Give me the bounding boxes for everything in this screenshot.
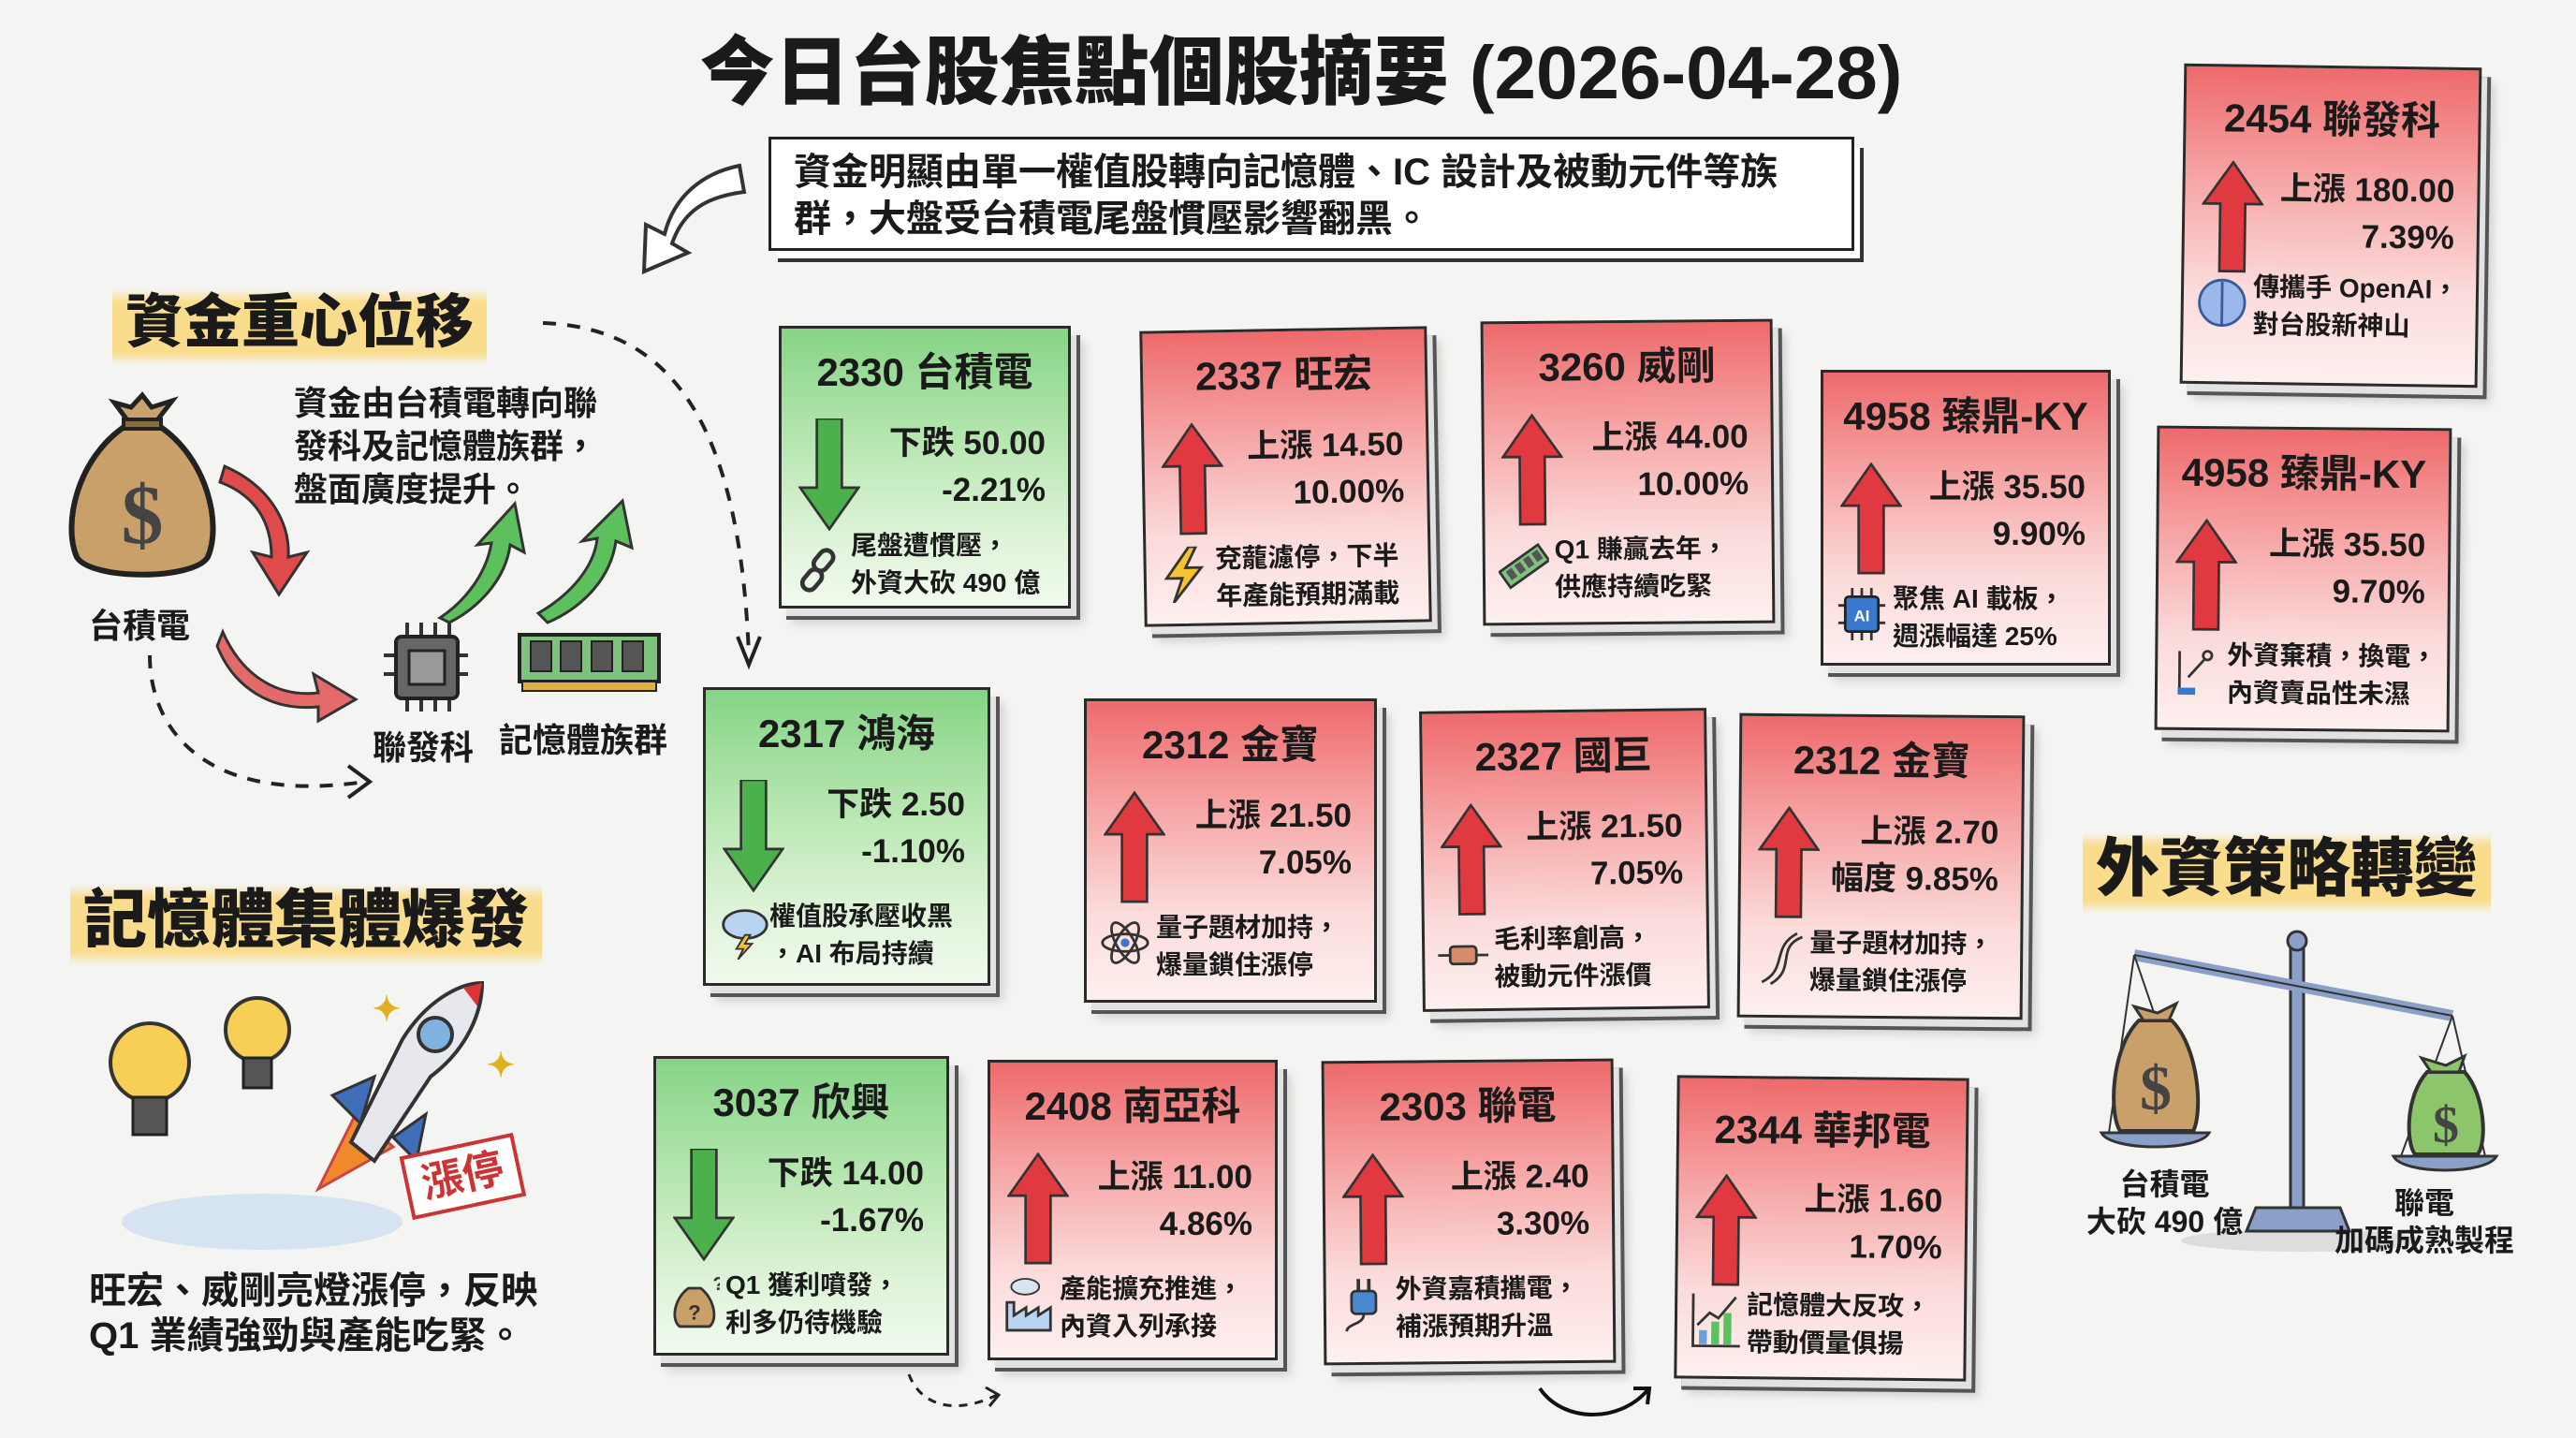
card: 2344 華邦電: 記憶體大反攻， (1747, 1290, 1930, 1321)
card: 2303 聯電 (1322, 1059, 1616, 1365)
card: 2344 華邦電: 帶動價量俱揚 (1747, 1328, 1904, 1358)
card: 2327 國巨: 上漲 21.50 (1526, 807, 1683, 845)
card: 3260 威剛: 上漲 44.00 (1591, 418, 1749, 456)
card: 2344 華邦電 (1674, 1075, 1969, 1382)
card: 2330 台積電: 下跌 50.00 (889, 425, 1046, 462)
illustration: lightbulbs and rocket: ✦ (487, 1046, 515, 1084)
card: 2317 鴻海: ，AI 布局持續 (769, 939, 934, 968)
card: 2303 聯電: 3.30% (1497, 1205, 1589, 1242)
icon: chip (384, 623, 468, 712)
card: 2454 聯發科: 2454 聯發科 (2224, 95, 2440, 143)
card: 2303 聯電: 補漲預期升溫 (1396, 1311, 1553, 1342)
text block: memory surge (89, 1270, 538, 1357)
card: 2337 旺宏: 2337 旺宏 (1195, 351, 1373, 399)
card: 2312 金寶 (1) (1084, 698, 1377, 1003)
card: 2454 聯發科: 對台股新神山 (2252, 310, 2410, 341)
card: 2454 聯發科: 上漲 180.00 (2279, 170, 2455, 210)
heading: 資金重心位移: 資金重心位移 (125, 290, 474, 355)
card: 2330 台積電: 外資大砍 490 億 (851, 568, 1040, 597)
card: 2337 旺宏: 年產能預期滿載 (1216, 579, 1399, 610)
card: 2317 鴻海: 權值股承壓收黑 (769, 902, 953, 931)
illustration: scale: $ (2140, 1052, 2172, 1123)
dashed arrow: bottom small (908, 1374, 1002, 1407)
icon: money bag 台積電: $ (122, 469, 163, 562)
card: 2408 南亞科: 4.86% (1160, 1206, 1252, 1242)
card: 3037 欣興: 3037 欣興 (712, 1080, 890, 1124)
card: 2312 金寶 (2): 上漲 2.70 (1860, 814, 1998, 851)
card: 3037 欣興: Q1 獲利噴發， (725, 1270, 899, 1299)
card: 2327 國巨: 被動元件漲價 (1494, 961, 1652, 991)
card: 2312 金寶 (2): 2312 金寶 (1793, 738, 1970, 784)
illustration: scale: $ (2433, 1096, 2459, 1154)
card: 2337 旺宏: 兗蘢濾停，下半 (1215, 541, 1399, 573)
card: 2408 南亞科: 產能擴充推進， (1060, 1274, 1243, 1303)
card: 2408 南亞科 (988, 1060, 1278, 1360)
card: 3037 欣興: ? (688, 1300, 701, 1324)
card: 3260 威剛: 供應持續吃緊 (1555, 571, 1712, 602)
card: 2303 聯電: 2303 聯電 (1379, 1083, 1557, 1129)
card: 2317 鴻海: 2317 鴻海 (758, 712, 935, 756)
card: 2344 華邦電: 上漲 1.60 (1804, 1181, 1943, 1219)
text block: capital shift: 盤面廣度提升。 (294, 470, 530, 508)
card: 2408 南亞科: 內資入列承接 (1060, 1312, 1217, 1341)
card: 4958 臻鼎-KY (1): 上漲 35.50 (1929, 469, 2086, 506)
card: 4958 臻鼎-KY (1): 4958 臻鼎-KY (1843, 394, 2088, 438)
card: 2312 金寶 (2): 爆量鎖住漲停 (1809, 965, 1967, 996)
label: 聯電 加碼成熟製程: 聯電 (2394, 1186, 2454, 1220)
card: 2344 華邦電: 1.70% (1849, 1228, 1942, 1266)
text block: memory surge: Q1 業績強勁與產能吃緊。 (89, 1315, 523, 1357)
dashed arrow: left loop (148, 655, 373, 800)
arrow: red curve to chip (215, 628, 359, 724)
label: 聯電 加碼成熟製程 (2334, 1186, 2514, 1257)
card: 2303 聯電: 上漲 2.40 (1451, 1158, 1589, 1196)
card: 2327 國巨: 7.05% (1590, 854, 1683, 892)
card: 4958 臻鼎-KY (2): 外資棄積，換電， (2227, 640, 2437, 671)
card: 3260 威剛 (1481, 319, 1775, 625)
arrow: curved from subtitle (642, 163, 747, 275)
label: 台積電 大砍490億: 大砍 490 億 (2086, 1205, 2243, 1239)
card: 2312 金寶 (1): 量子題材加持， (1156, 913, 1339, 942)
card: 2327 國巨 (1419, 708, 1710, 1012)
card: 4958 臻鼎-KY (2): 內資賣品性未濕 (2227, 678, 2410, 709)
card: 2327 國巨: 2327 國巨 (1474, 733, 1652, 779)
card: 2330 台積電 (779, 326, 1071, 609)
card: 2408 南亞科: 上漲 11.00 (1098, 1159, 1252, 1196)
card: 3037 欣興 (653, 1056, 949, 1356)
arrow: red down (218, 464, 311, 597)
card: 4958 臻鼎-KY (1) (1821, 370, 2111, 666)
card: 2303 聯電: 外資嘉積攜電， (1396, 1273, 1579, 1304)
card: 4958 臻鼎-KY (1): AI (1854, 607, 1869, 624)
card: 2454 聯發科: 傳攜手 OpenAI， (2253, 272, 2459, 304)
label: 台積電 大砍490億: 台積電 (2119, 1167, 2209, 1201)
card: 4958 臻鼎-KY (2) (2155, 426, 2452, 732)
card: 2317 鴻海 (703, 687, 990, 986)
card: 2312 金寶 (1): 上漲 21.50 (1195, 798, 1352, 834)
card: 2317 鴻海: 下跌 2.50 (827, 786, 965, 823)
card: 2312 金寶 (1): 2312 金寶 (1142, 723, 1319, 767)
card: 2454 聯發科: 7.39% (2361, 218, 2454, 257)
card: 2330 台積電: 2330 台積電 (816, 350, 1033, 394)
subtitle callout box (768, 137, 1854, 251)
card: 3260 威剛: 10.00% (1637, 465, 1749, 503)
card: 4958 臻鼎-KY (1): 聚焦 AI 載板， (1893, 584, 2065, 613)
card: 2312 金寶 (2) (1737, 713, 2025, 1020)
icon: money bag 台積電 (68, 391, 215, 578)
card: 4958 臻鼎-KY (2): 上漲 35.50 (2269, 526, 2425, 564)
card: 3037 欣興: 利多仍待機驗 (725, 1308, 883, 1337)
card: 2327 國巨: 毛利率創高， (1494, 923, 1651, 954)
card: 2312 金寶 (1): 爆量鎖住漲停 (1156, 950, 1313, 979)
heading: 外資策略轉變: 外資策略轉變 (2096, 833, 2478, 904)
card: 2330 台積電: -2.21% (942, 472, 1046, 508)
card: 2312 金寶 (2): 幅度 9.85% (1831, 860, 1998, 898)
illustration: lightbulbs and rocket (109, 981, 526, 1250)
card: 4958 臻鼎-KY (1): 9.90% (1993, 516, 2086, 552)
illustration: lightbulbs and rocket: ✦ (373, 990, 401, 1028)
dashed arrow: heading to cards (543, 321, 762, 670)
card: 2330 台積電: 尾盤遭慣壓， (851, 531, 1008, 560)
card: 2312 金寶 (2): 量子題材加持， (1809, 928, 1993, 959)
text block: capital shift (294, 384, 597, 508)
card: 2337 旺宏 (1139, 326, 1432, 627)
icon: RAM (518, 633, 661, 692)
card: 2317 鴻海: -1.10% (861, 833, 965, 870)
card: 2344 華邦電: 2344 華邦電 (1714, 1108, 1931, 1153)
card: 3037 欣興: 下跌 14.00 (768, 1155, 924, 1192)
subtitle callout box: 資金明顯由單一權值股轉向記憶體、IC 設計及被動元件等族群，大盤受台積電尾盤慣壓影響翻黑。 (794, 152, 1778, 240)
label: 記憶體族群: 記憶體族群 (499, 721, 667, 759)
text block: capital shift: 發科及記憶體族群， (294, 427, 597, 465)
card: 4958 臻鼎-KY (2): 9.70% (2332, 573, 2425, 610)
card: 2337 旺宏: 上漲 14.50 (1247, 426, 1404, 465)
illustration: lightbulbs and rocket: 漲停 (417, 1145, 508, 1208)
label: 聯電 加碼成熟製程: 加碼成熟製程 (2334, 1224, 2514, 1257)
card: 3260 威剛: 3260 威剛 (1538, 344, 1716, 389)
text block: memory surge: 旺宏、威剛亮燈漲停，反映 (89, 1270, 538, 1312)
card: 2312 金寶 (1): 7.05% (1259, 844, 1352, 881)
title: 今日台股焦點個股摘要 (2026-04-28) (700, 31, 1902, 114)
card: 3260 威剛: Q1 賺贏去年， (1555, 534, 1728, 565)
text block: capital shift: 資金由台積電轉向聯 (294, 384, 597, 422)
label: 台積電: 台積電 (89, 607, 190, 645)
card: 2454 聯發科 (2180, 64, 2481, 388)
label: 聯發科: 聯發科 (373, 728, 474, 767)
card: 4958 臻鼎-KY (2): 4958 臻鼎-KY (2182, 450, 2426, 496)
label: 台積電 大砍490億 (2086, 1167, 2243, 1239)
arrow: bottom curve (1538, 1387, 1651, 1416)
arrows: green up (437, 498, 634, 624)
card: 2337 旺宏: 10.00% (1293, 473, 1405, 511)
card: 2408 南亞科: 2408 南亞科 (1024, 1084, 1241, 1128)
heading: 記憶體集體爆發: 記憶體集體爆發 (83, 885, 529, 956)
card: 3037 欣興: -1.67% (820, 1202, 924, 1239)
illustration: scale (2099, 931, 2499, 1252)
card: 4958 臻鼎-KY (1): 週漲幅達 25% (1893, 622, 2057, 651)
